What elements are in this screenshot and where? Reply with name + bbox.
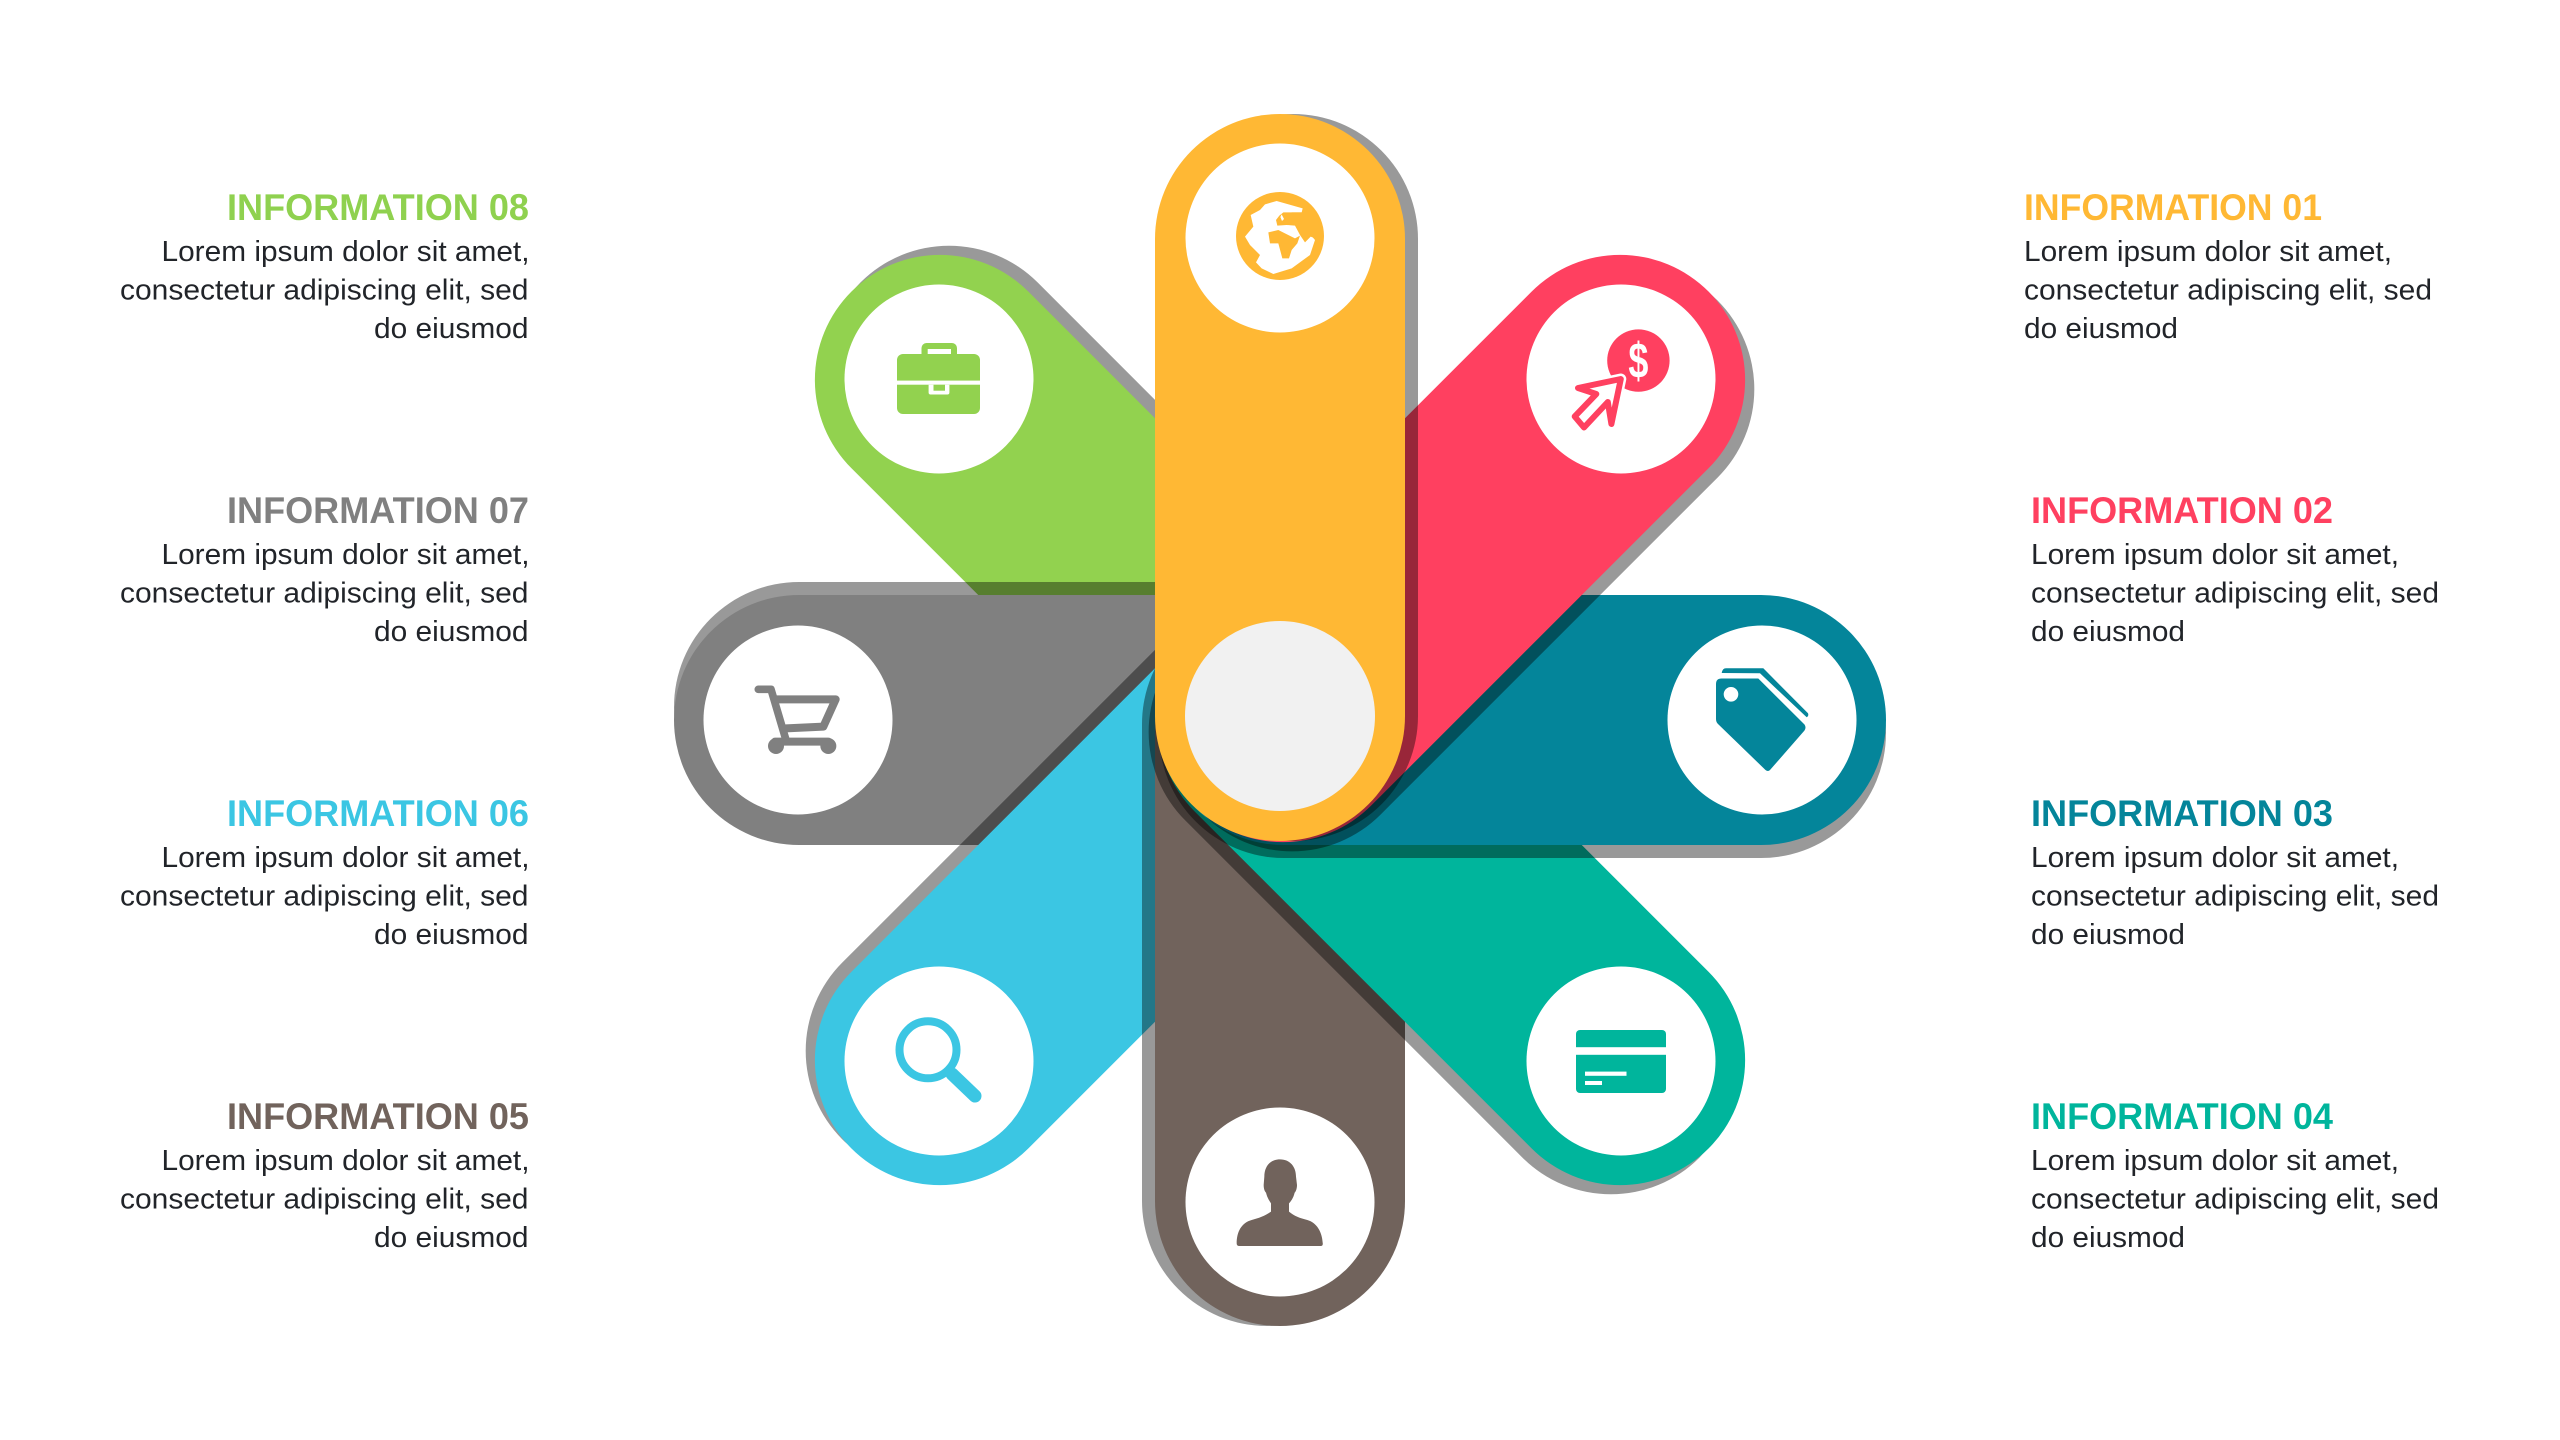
text block: information 03: consectetur adipiscing elit, sed bbox=[2031, 880, 2439, 912]
text block: information 08: INFORMATION 08 bbox=[227, 187, 529, 228]
text block: information 06: do eiusmod bbox=[374, 919, 528, 951]
petal 01: yellow globe bbox=[1155, 114, 1418, 841]
text block: information 05: Lorem ipsum dolor sit amet, bbox=[162, 1145, 530, 1177]
icon: briefcase bbox=[897, 343, 980, 414]
text block: information 05 bbox=[120, 1096, 530, 1254]
text block: information 07: INFORMATION 07 bbox=[227, 490, 529, 531]
text block: information 08 bbox=[120, 187, 530, 345]
text block: information 07: consectetur adipiscing elit, sed bbox=[120, 578, 528, 610]
icon: magnifier bbox=[900, 1021, 975, 1096]
icon: dollar cursor bbox=[1575, 329, 1670, 428]
text block: information 03: Lorem ipsum dolor sit amet, bbox=[2031, 842, 2399, 874]
text block: information 08: Lorem ipsum dolor sit amet, bbox=[162, 236, 530, 268]
text block: information 08: do eiusmod bbox=[374, 313, 528, 345]
text block: information 04: Lorem ipsum dolor sit amet, bbox=[2031, 1145, 2399, 1177]
icon: person bbox=[1237, 1159, 1323, 1246]
text block: information 01 bbox=[2024, 187, 2432, 345]
text block: information 05: do eiusmod bbox=[374, 1222, 528, 1254]
icon: shopping cart bbox=[758, 689, 836, 754]
text block: information 04: consectetur adipiscing elit, sed bbox=[2031, 1184, 2439, 1216]
text block: information 01: consectetur adipiscing elit, sed bbox=[2024, 274, 2432, 306]
petal 08: green briefcase bbox=[763, 194, 1463, 894]
text block: information 05: consectetur adipiscing elit, sed bbox=[120, 1184, 528, 1216]
text block: information 02: Lorem ipsum dolor sit amet, bbox=[2031, 539, 2399, 571]
icon: credit card bbox=[1576, 1030, 1666, 1093]
text block: information 07: Lorem ipsum dolor sit amet, bbox=[162, 539, 530, 571]
petal 05: brown person bbox=[1142, 599, 1405, 1326]
text block: information 04: do eiusmod bbox=[2031, 1222, 2185, 1254]
text block: information 04: INFORMATION 04 bbox=[2031, 1096, 2333, 1137]
text block: information 01: Lorem ipsum dolor sit amet, bbox=[2024, 236, 2392, 268]
text block: information 08: consectetur adipiscing elit, sed bbox=[120, 274, 528, 306]
text block: information 06: consectetur adipiscing elit, sed bbox=[120, 880, 528, 912]
text block: information 05: INFORMATION 05 bbox=[227, 1096, 529, 1137]
petal 02: red dollar cursor bbox=[1106, 203, 1806, 903]
text block: information 02: do eiusmod bbox=[2031, 616, 2185, 648]
text block: information 02 bbox=[2031, 490, 2439, 648]
text block: information 07: do eiusmod bbox=[374, 616, 528, 648]
icon: globe bbox=[1236, 192, 1324, 280]
text block: information 02: INFORMATION 02 bbox=[2031, 490, 2333, 531]
text block: information 06: INFORMATION 06 bbox=[227, 793, 529, 834]
petal 04: teal-green card bbox=[1097, 546, 1797, 1246]
petal 06: blue magnifier bbox=[754, 537, 1454, 1237]
center hub circle bbox=[1185, 621, 1375, 811]
petal 03: teal tag bbox=[1159, 595, 1886, 858]
petal 07: gray cart bbox=[674, 582, 1401, 845]
icon: price tag bbox=[1716, 668, 1808, 771]
text block: information 03: INFORMATION 03 bbox=[2031, 793, 2333, 834]
text block: information 06 bbox=[120, 793, 530, 951]
text block: information 01: INFORMATION 01 bbox=[2024, 187, 2322, 228]
text block: information 01: do eiusmod bbox=[2024, 313, 2178, 345]
text block: information 07 bbox=[120, 490, 530, 648]
text block: information 04 bbox=[2031, 1096, 2439, 1254]
text block: information 03: do eiusmod bbox=[2031, 919, 2185, 951]
text block: information 03 bbox=[2031, 793, 2439, 951]
icon: dollar cursor: $ bbox=[1628, 333, 1649, 389]
text block: information 02: consectetur adipiscing elit, sed bbox=[2031, 578, 2439, 610]
text block: information 06: Lorem ipsum dolor sit amet, bbox=[162, 842, 530, 874]
